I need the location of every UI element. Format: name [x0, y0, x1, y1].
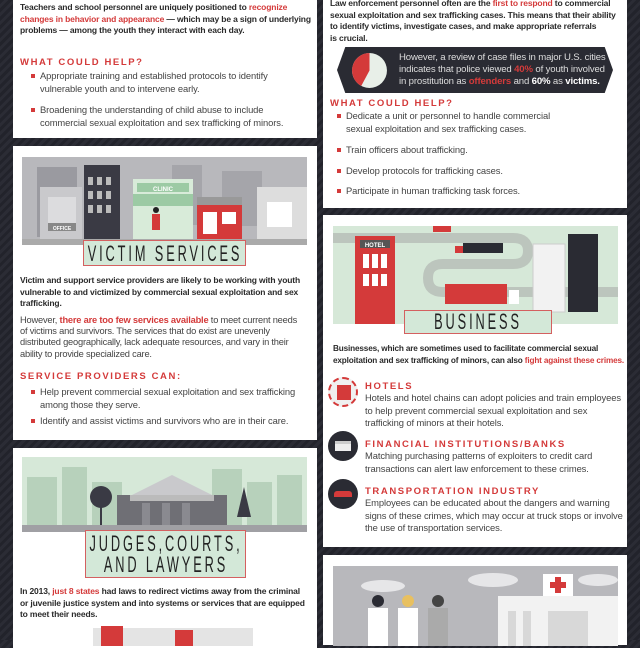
list: [40, 70, 268, 95]
panel: victim services: [13, 146, 317, 440]
illustration: doctors and hospital: [333, 566, 618, 646]
icon: car: [328, 479, 358, 509]
item: transportation industry: TRANSPORTATION INDUSTRY: [365, 486, 540, 497]
panel: law enforcement: Develop protocols for trafficking cases.: [346, 165, 503, 176]
item: hotels: to help prevent commercial sexual exploitation and sex: [365, 405, 587, 416]
intro text: Teachers and school personnel are uniquely positioned to recognize: [20, 2, 287, 12]
list: Help prevent commercial sexual exploitation and sex trafficking: [40, 386, 295, 397]
item: financial institutions: transactions can alert law enforcement to these crimes.: [365, 463, 589, 474]
intro text: sexual exploitation and sex trafficking cases. This means that their ability: [330, 10, 616, 20]
heading: what could help: WHAT COULD HELP?: [20, 57, 144, 68]
illustration: street scene: [22, 157, 307, 245]
panel: business: [323, 215, 627, 547]
text: intro: trafficking.: [20, 298, 62, 308]
heading: service providers can: SERVICE PROVIDERS CAN:: [20, 371, 182, 382]
icon: credit card: [328, 431, 358, 461]
text: intro: [20, 275, 300, 308]
illustration: hotel, trucks, road: HOTEL: [365, 243, 385, 249]
heading: what could help: WHAT COULD HELP?: [330, 98, 454, 109]
list: [346, 110, 550, 135]
illustration: street scene: CLINIC: [153, 187, 174, 193]
list: Appropriate training and established protocols to identify: [40, 70, 268, 81]
text: intro: exploitation and sex trafficking of minors, can also fight against these crimes.: [333, 356, 624, 364]
label: judges courts and lawyers: AND LAWYERS: [103, 552, 228, 577]
map fragment: [93, 626, 253, 646]
text: 8 states: or juvenile justice system and into systems or services that are equipped: [20, 598, 305, 608]
text: too few services: However, there are too few services available to meet current needs: [20, 315, 297, 325]
label: judges courts and lawyers: [85, 530, 246, 578]
item: hotels: HOTELS: [365, 381, 413, 392]
item: transportation industry: [365, 486, 623, 533]
list: Dedicate a unit or personnel to handle commercial: [346, 110, 550, 121]
item: financial institutions: FINANCIAL INSTITUTIONS/BANKS: [365, 439, 566, 450]
label: victim services: VICTIM SERVICES: [87, 241, 242, 266]
text: 8 states: to meet their needs.: [20, 609, 97, 619]
intro text: [330, 0, 616, 42]
item: hotels: trafficking of minors at their hotels.: [365, 417, 504, 428]
text: 8 states: In 2013, just 8 states had laws to redirect victims away from the criminal: [20, 586, 300, 596]
item: transportation industry: signs of these crimes, which may occur at truck stops or involve: [365, 510, 623, 521]
callout text: [400, 54, 606, 86]
intro text: [20, 2, 311, 35]
intro text: is crucial.: [330, 32, 368, 42]
text: too few services: [20, 315, 297, 359]
item: hotels: [365, 381, 621, 428]
panel: law enforcement: Train officers about trafficking.: [346, 144, 468, 155]
list: among those they serve.: [40, 398, 140, 410]
panel: schools: Broadening the understanding of child abuse to include: [40, 104, 263, 115]
item: financial institutions: [365, 439, 592, 474]
illustration: street scene: OFFICE: [53, 226, 72, 232]
label: business: [404, 310, 552, 334]
text: intro: Businesses, which are sometimes used to facilitate commercial sexual: [333, 344, 598, 353]
label: judges courts and lawyers: JUDGES,COURTS,: [89, 531, 242, 556]
text: too few services: ability to provide specialized care.: [20, 349, 152, 359]
text: 8 states: [20, 586, 305, 619]
item: financial institutions: Matching purchasing patterns of exploiters to credit card: [365, 450, 592, 461]
icon: hotel: [328, 377, 358, 407]
intro text: to identify victims, investigate cases, and make appropriate referrals: [330, 21, 596, 31]
panel: health care: [323, 555, 627, 645]
text: too few services: distributed geographically, lack adequate resources, and vary in their: [20, 337, 289, 347]
panel: victim services: Identify and assist victims and survivors who are in their care.: [40, 415, 288, 426]
callout: 40% pie: [337, 47, 613, 93]
callout text: However, a review of case files in major U.S. cities: [399, 52, 606, 63]
list: vulnerable youth and to intervene early.: [40, 82, 199, 94]
illustration: courthouse: [22, 457, 307, 532]
panel: law enforcement: [323, 0, 627, 208]
item: hotels: Hotels and hotel chains can adopt policies and train employees: [365, 392, 621, 403]
text: intro: Victim and support service providers are likely to be working with youth: [20, 275, 300, 285]
panel: schools: [13, 0, 317, 138]
callout text: indicates that police viewed 40% of youth involved: [399, 64, 605, 75]
text: intro: vulnerable to and victimized by commercial sexual exploitation and sex: [20, 286, 298, 296]
item: transportation industry: Employees can be educated about the dangers and warning: [365, 497, 610, 508]
panel: law enforcement: Participate in human trafficking task forces.: [346, 185, 520, 196]
intro text: changes in behavior and appearance — which may be a sign of underlying: [20, 14, 311, 24]
list: [40, 386, 295, 411]
intro text: problems — among the youth they interact with each day.: [20, 25, 244, 35]
callout text: in prostitution as offenders and 60% as victims.: [399, 76, 600, 87]
panel: schools: commercial sexual exploitation and sex trafficking of minors.: [40, 116, 283, 128]
illustration: hotel, trucks, road: [333, 226, 618, 324]
text: intro: [333, 344, 624, 364]
list: sexual exploitation and sex trafficking cases.: [346, 122, 526, 134]
text: too few services: of victims and survivors. The services that do exist are unevenly: [20, 326, 270, 336]
item: transportation industry: the use of transportation services.: [365, 522, 502, 533]
panel: judges courts lawyers: [13, 448, 317, 648]
pie chart: [352, 53, 387, 88]
